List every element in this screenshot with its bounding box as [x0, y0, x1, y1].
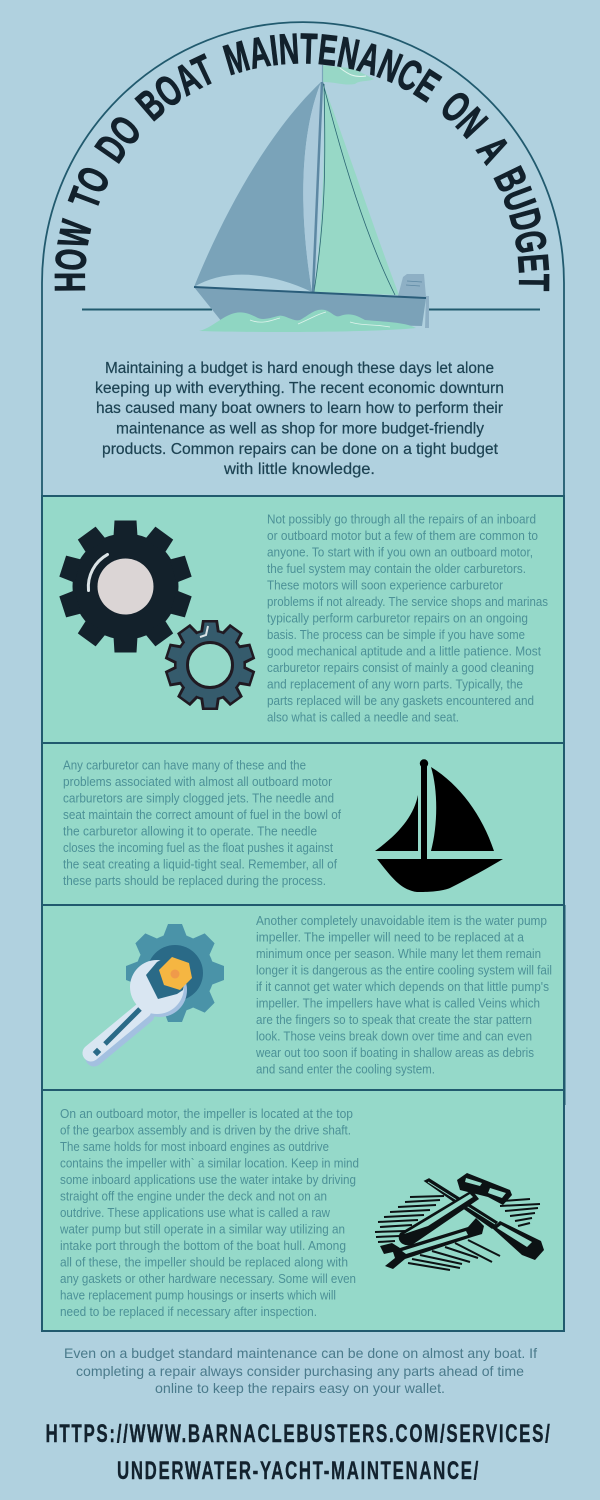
text block: needle and seat: closes the incoming fuel as the float pushes it against — [63, 841, 333, 855]
text block: carburetor repairs: or outboard motor but a few of them are common to — [267, 529, 538, 543]
icon: large and small gears — [59, 520, 256, 710]
text block: impeller location: of the gearbox assembly and is driven by the drive shaft. — [60, 1124, 351, 1138]
text block: carburetor repairs: and replacement of any worn parts. Typically, the — [267, 678, 523, 692]
text block: impeller location: need to be replaced if necessary after inspection. — [60, 1305, 317, 1319]
text block: needle and seat: problems associated with almost all outboard motor — [63, 775, 332, 789]
intro text block: Maintaining a budget is hard enough these days let alone — [105, 360, 494, 377]
text block: needle and seat: the seat creating a liquid-tight seal. Remember, all of — [63, 858, 337, 872]
text block: water pump impeller: Another completely unavoidable item is the water pump — [256, 914, 547, 928]
text block: carburetor repairs — [267, 512, 548, 724]
text block: carburetor repairs: basis. The process can be simple if you have some — [267, 628, 525, 642]
panel: impeller location — [42, 1090, 564, 1331]
text block: impeller location: water pump but still operate in a similar way utilizing an — [59, 1222, 345, 1236]
text block: water pump impeller: impeller. The impeller will need to be replaced at a — [256, 930, 524, 944]
text block: impeller location: contains the impeller with` a similar location. Keep in mind — [60, 1156, 359, 1170]
text block: impeller location: all of these, the impeller should be replaced along with — [60, 1256, 348, 1270]
panel: carburetor repairs — [42, 496, 564, 743]
text block: impeller location: The same holds for most inboard engines as outdrive — [60, 1140, 329, 1154]
horizon line — [82, 308, 540, 310]
text block: carburetor repairs: These motors will soon experience carburetor — [267, 578, 503, 592]
icon: black sailboat silhouette — [375, 759, 503, 892]
website URL heading — [46, 1420, 552, 1485]
panel: arch header frame — [42, 22, 564, 497]
text block: carburetor repairs: parts replaced will be any gaskets encountered and — [267, 694, 534, 708]
intro text block: maintenance as well as shop for more budget-friendly — [116, 420, 484, 438]
icon: wrench and gear — [91, 924, 224, 1058]
text block: carburetor repairs: also what is called a needle and seat. — [267, 710, 459, 724]
icon: hand tools woodcut — [375, 1173, 544, 1270]
text block: water pump impeller: impeller. The impellers have what is called Veins which — [256, 996, 540, 1010]
text block: carburetor repairs: good mechanical aptitude and a little patience. Most — [267, 644, 541, 658]
text block: carburetor repairs: the fuel system may contain the older carburetors. — [267, 562, 526, 576]
text block: needle and seat: seat maintain the correct amount of fuel in the bowl of — [63, 808, 341, 822]
text block: water pump impeller: wear out too soon if boating in shallow areas as debris — [255, 1046, 534, 1060]
text block: needle and seat: carburetors are simply clogged jets. The needle and — [63, 792, 334, 806]
closing text block: Even on a budget standard maintenance can be done on almost any boat. If — [64, 1345, 537, 1361]
text block: impeller location: have replacement pump housings or inserts which will — [60, 1288, 336, 1302]
text block: water pump impeller: minimum once per season. While many let them remain — [256, 947, 541, 961]
closing text block — [64, 1345, 537, 1396]
text block: impeller location — [59, 1107, 359, 1319]
intro text block — [95, 360, 504, 478]
text block: impeller location: any gaskets or other hardware necessary. Some will even — [60, 1272, 356, 1286]
text block: carburetor repairs: problems if not already. The service shops and marinas — [267, 595, 548, 609]
intro text block: with little knowledge. — [223, 461, 375, 478]
text block: carburetor repairs: carburetor repairs consist of mainly a good cleaning — [267, 661, 534, 675]
intro text block: has caused many boat owners to learn how to perform their — [96, 400, 503, 417]
text block: needle and seat: the carburetor allowing it to operate. The needle — [63, 824, 317, 838]
panel: needle and seat — [42, 743, 564, 905]
text block: water pump impeller: and sand enter the cooling system. — [256, 1062, 435, 1076]
closing text block: online to keep the repairs easy on your wallet. — [155, 1380, 445, 1396]
text block: needle and seat — [63, 758, 341, 888]
intro text block: keeping up with everything. The recent economic downturn — [95, 380, 504, 397]
text block: carburetor repairs: anyone. To start with if you own an outboard motor, — [267, 546, 533, 560]
text block: water pump impeller — [255, 914, 552, 1076]
text block: water pump impeller: are the fingers so to speak that create the star pattern — [256, 1013, 532, 1027]
title: HOW TO DO BOAT MAINTENANCE ON A BUDGET — [54, 33, 550, 292]
text block: carburetor repairs: typically perform carburetor repairs on an ongoing — [267, 612, 528, 626]
text block: impeller location: On an outboard motor, the impeller is located at the top — [60, 1107, 353, 1121]
text block: impeller location: outdrive. These applications use what is called a raw — [60, 1206, 331, 1220]
text block: water pump impeller: look. Those veins break down over time and can even — [256, 1030, 532, 1044]
panel: water pump impeller — [42, 905, 564, 1105]
text block: carburetor repairs: Not possibly go through all the repairs of an inboard — [267, 512, 536, 526]
text block: needle and seat: Any carburetor can have many of these and the — [63, 758, 306, 772]
icon: sailboat illustration — [194, 65, 429, 332]
closing text block: completing a repair always consider purchasing any parts ahead of time — [76, 1363, 524, 1379]
intro text block: products. Common repairs can be done on a tight budget — [102, 441, 499, 458]
text block: impeller location: intake port through the bottom of the boat hull. Among — [60, 1239, 346, 1253]
text block: needle and seat: these parts should be replaced during the process. — [63, 874, 326, 888]
text block: water pump impeller: if it cannot get water which depends on that little pump's — [256, 980, 549, 994]
text block: water pump impeller: longer it is dangerous as the entire cooling system will fail — [256, 964, 552, 978]
text block: impeller location: straight off the engine under the deck and not on an — [60, 1190, 327, 1204]
text block: impeller location: some inboard applications use the water intake by driving — [60, 1173, 356, 1187]
